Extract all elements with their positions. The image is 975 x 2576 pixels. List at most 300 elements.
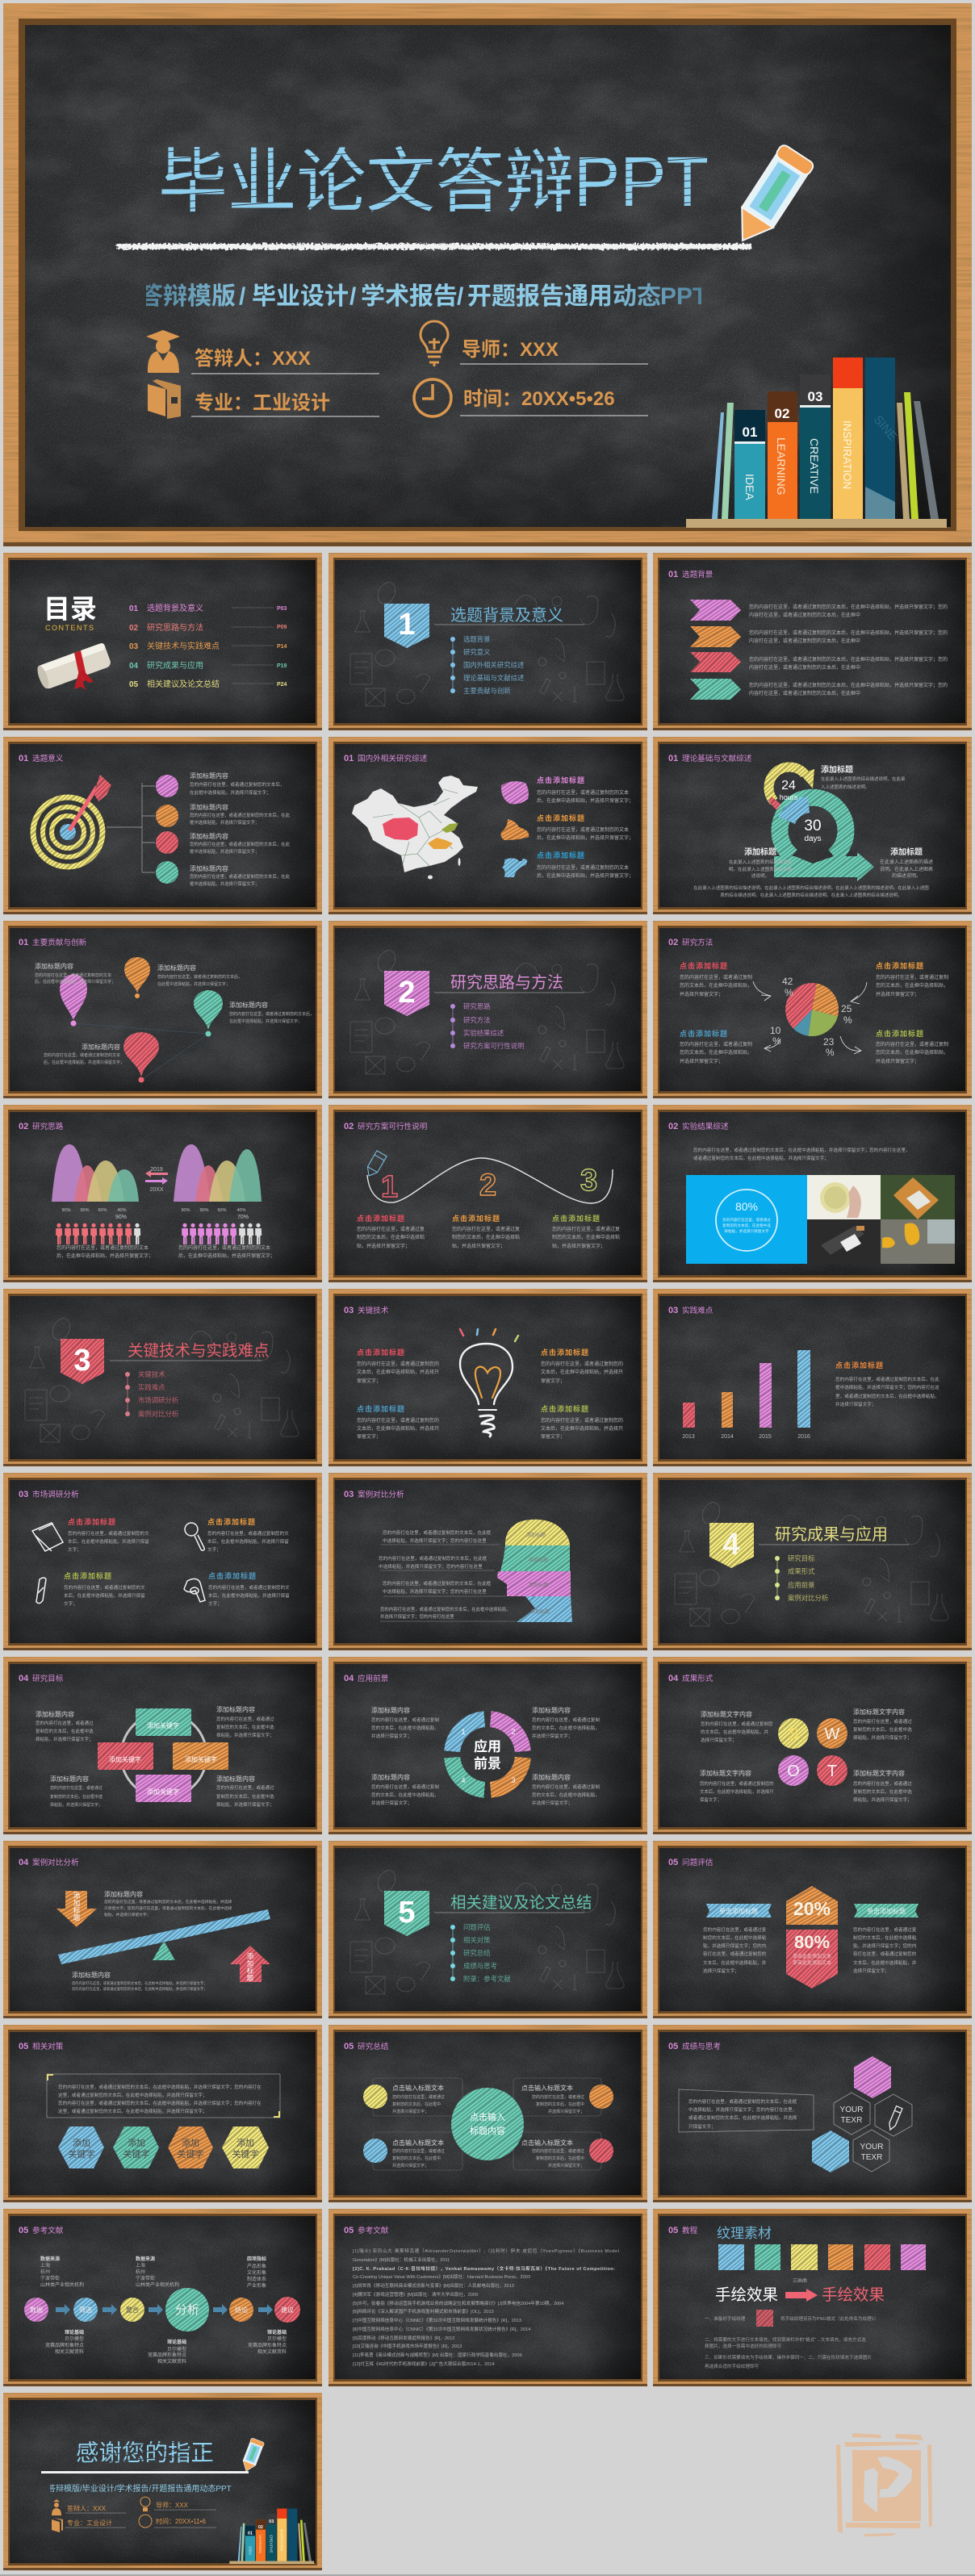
text blocks: 点击添加标题	[537, 851, 585, 859]
section bullets: 应用前景	[788, 1581, 815, 1589]
slide header: 研究总结	[358, 2042, 389, 2051]
text blocks: 您的内容打在这里，或者通过	[392, 2094, 445, 2100]
text blocks: 您的内容打在这里，或者通过	[36, 1720, 94, 1726]
intro text: 您的内容打在这里，或者通过复制您的文本后，在此框中选择粘贴，并选择只保留文字；您的内容打在这里，	[693, 1147, 910, 1153]
text blocks: 在此录入上述图表的综合描述说明，在此录	[821, 776, 906, 782]
text blocks: 您的内容打在这里，或者通过复	[552, 1226, 620, 1232]
slide header: 选题背景	[682, 570, 713, 579]
text blocks: 选择只保留文字；	[701, 1737, 737, 1743]
slide header: 市场调研分析	[32, 1490, 79, 1499]
percentage labels: 40%	[236, 1208, 246, 1213]
shield badge 1: 1	[398, 608, 416, 642]
text blocks: 择粘贴，并选择只保留文字；	[216, 1801, 274, 1808]
color swatches	[718, 2244, 926, 2270]
text blocks: 添加标题文字内容	[853, 1769, 905, 1777]
balance diagram: 题	[73, 1913, 81, 1922]
text blocks: 文字；	[64, 1600, 77, 1607]
pie chart	[753, 976, 867, 1058]
slide header: 研究思路	[32, 1122, 64, 1131]
bar chart: 2013	[682, 1434, 695, 1440]
slide header: 02	[344, 1122, 354, 1131]
text blocks: 点击添加标题	[68, 1517, 116, 1526]
SWOT circles: T	[827, 1763, 837, 1780]
text blocks: 您的文本后，在此框中选择粘贴，	[371, 1725, 439, 1731]
slide: topic significance	[3, 737, 322, 914]
photo: yellow chairs	[881, 1219, 955, 1264]
numbered outlines	[381, 1164, 597, 1204]
hero subtitle: 开题报告通用动态	[467, 283, 661, 310]
reference lines: [7]中国互联网络信息中心（CNNIC）《第32次中国互联网络发展统计报告》[R]，2013	[353, 2317, 521, 2323]
arrow list	[690, 600, 741, 700]
balance diagram	[56, 1891, 270, 1982]
top notes: 宁波带街	[40, 2275, 60, 2281]
text blocks: 您的内容打在这里，或者通过复制您的文本后，在此框中选择粘贴，并选择只保留文字；您的	[749, 604, 948, 610]
icon: bookshelf: CREATIVE	[808, 438, 821, 494]
text block: 您的内容打在这里，或者通过复制您的文本后，在此	[835, 1376, 939, 1382]
icon: bookshelf	[229, 2508, 314, 2564]
map pins	[60, 957, 223, 1083]
intro text	[693, 1147, 910, 1161]
slide header: 教程	[682, 2226, 698, 2235]
outlined frames	[373, 2078, 601, 2170]
slide: tutorial	[653, 2209, 972, 2386]
text blocks: 内容打在这里，或者通过复制您的文本后，在此框中	[749, 690, 860, 696]
slide header	[668, 2226, 698, 2235]
icon: bookshelf: LEARNING	[775, 437, 788, 496]
text blocks: 您的文本后，在此框中选择粘贴，	[876, 982, 948, 989]
hero subtitle	[146, 282, 701, 307]
top notes: 上海	[40, 2262, 50, 2269]
slanted text box: 或者通过复制您的文本后，在此框中选择粘贴，并选择	[688, 2114, 797, 2121]
section bullets: 实验结果综述	[463, 1029, 504, 1037]
text blocks: 您的内容打在这里，或者通过复制您的文本	[44, 1052, 120, 1058]
text blocks: 您的内容打在这里，或者通过	[532, 2148, 584, 2154]
icon: bookshelf: SINE	[871, 413, 899, 443]
text block: 里，或者通过复制您的文本后，在此框中选择粘贴，	[835, 1393, 939, 1399]
tutorial steps: 一、准备好手绘纹理	[705, 2315, 746, 2322]
process flow: 分析	[175, 2303, 199, 2317]
text blocks: 点击添加标题	[357, 1214, 405, 1223]
text blocks: 您的内容打在这里，或者通过复制您的文本后，在此框中选择粘贴，并选择	[104, 1899, 232, 1905]
area chart left	[52, 1144, 139, 1202]
text blocks: 您的内容打在这里，或者通过复制	[680, 974, 752, 981]
tutorial steps: 择图片，选择一张需中选好的纹理即可	[705, 2343, 782, 2349]
percent banners: 80%	[794, 1932, 830, 1952]
slide header	[19, 2226, 64, 2235]
slide header: 选题意义	[32, 754, 64, 763]
keyword hexagons: 添加	[236, 2137, 254, 2148]
icon: bulb	[421, 321, 448, 366]
ribbons: 单击添加标题	[867, 1907, 906, 1915]
text blocks: 并选择只保留文字；	[392, 2109, 429, 2114]
closing info	[52, 2497, 206, 2532]
pie chart: 10	[770, 1025, 781, 1036]
blue panel with 80%: 80%	[735, 1200, 758, 1213]
text blocks: 贴，并选择只保留文字；	[552, 1243, 605, 1249]
slide: section 1	[328, 553, 647, 730]
text blocks	[392, 2084, 584, 2168]
text blocks: 择粘贴，并选择只保留文字；	[36, 1736, 94, 1742]
text blocks: 点击输入标题文本	[521, 2139, 573, 2147]
reference lines	[353, 2248, 619, 2367]
keyword hexagons: 关键字	[178, 2148, 203, 2160]
percent banners: 单击此处添加文本	[793, 1959, 831, 1966]
section bullets: 选题背景	[463, 635, 491, 643]
icon: bookshelf: 01	[743, 424, 757, 440]
text blocks: 复制您的文本后，在此框中选	[36, 1728, 94, 1734]
slide header: 05	[668, 2042, 678, 2051]
pie chart: 25	[841, 1003, 852, 1014]
text blocks: 文本后，在此框中选择粘贴，并	[703, 1959, 767, 1966]
text blocks	[190, 772, 291, 887]
text blocks: 您的内容打在这里，或者通过复制您的文本后，在此框中选择粘贴，并选择只保留文字；您的	[749, 629, 948, 636]
contents list: P24	[277, 682, 287, 688]
text blocks: 点击添加标题	[680, 961, 728, 970]
balance diagram: 添	[73, 1892, 81, 1900]
hand-drawn effect demo: 三画曲	[793, 2277, 807, 2284]
cycle diagram: 24	[781, 779, 796, 792]
text blocks: 保留文字；	[357, 1378, 381, 1384]
slide header: 01	[19, 938, 28, 947]
central circle	[451, 2088, 524, 2160]
text blocks: 后，在此框中选择粘贴，并选择只保留文字；	[537, 797, 634, 804]
slide header: 关键技术	[358, 1306, 389, 1315]
slide header: 相关对策	[32, 2042, 64, 2051]
text blocks: 后，在此框中选择粘贴，并选择只保留文字；	[537, 872, 634, 879]
text blocks: 您的文本后，在此框中选择粘贴，	[532, 1725, 600, 1731]
bottom notes	[45, 2329, 287, 2365]
slide header: 成果形式	[682, 1674, 713, 1683]
icon: bookshelf: 03	[269, 2520, 274, 2524]
reference lines: [4]魏洪军《游戏运营管理》[M]出版社：清华大学出版社，2009	[353, 2291, 478, 2298]
bottom notes: 相关文献资料	[157, 2358, 186, 2365]
text blocks: 只保留文字。您的内容打在这里，或者通过复制您的文本后，在此框中选择	[104, 1905, 232, 1911]
text blocks: 在此录入上述图表的综合描述说明。在此录入上述图表的综合描述说明。在此录入上述图表的描述说明。在此录入上述图	[693, 884, 929, 891]
text blocks: 您的内容打在这里，或者通过复制您的文本	[56, 1244, 149, 1251]
text blocks: 文本后，在此框中选择粘贴，并选择只	[541, 1425, 623, 1432]
text blocks	[56, 1244, 275, 1259]
slide header	[19, 2042, 64, 2051]
top notes: 四项指标	[247, 2256, 266, 2262]
section bullets	[775, 1554, 828, 1602]
logo watermark stamp	[836, 2433, 932, 2536]
shield badge 5	[384, 1891, 429, 1936]
text blocks: 添加标题内容	[371, 1773, 410, 1781]
text blocks: 您的内容打在这里，或者通过复制	[371, 1717, 439, 1723]
text blocks: 您的文本后，在此框中选择粘贴，	[680, 982, 752, 989]
section bullets: 实践难点	[138, 1383, 165, 1391]
hexagon cluster: YOUR	[840, 2106, 863, 2114]
text blocks: 您的内容打在这里，或者通过复制您的文本	[537, 826, 629, 833]
slide: thank you	[3, 2393, 322, 2570]
slide header: 实验结果综述	[682, 1122, 729, 1131]
keyword hexagons	[58, 2126, 269, 2168]
text blocks: 您的内容打在这里，或者通过复制您的文本后，在此	[190, 873, 291, 880]
text blocks: 您的内容打在这里，或者通过复制您的文	[207, 1530, 289, 1537]
bottom notes: 贝尔模型	[267, 2336, 287, 2342]
slide: key technology bulb	[328, 1289, 647, 1466]
hero subtitle: /	[349, 283, 357, 310]
text blocks	[700, 1708, 912, 1803]
keyword hexagons: 添加	[182, 2137, 199, 2148]
text blocks: 点击添加标题	[207, 1517, 256, 1526]
text blocks: 添加标题内容	[36, 1710, 74, 1718]
text blocks: 框中选择粘贴，并选择只保留文字；	[190, 819, 259, 826]
slide header: 02	[668, 938, 678, 947]
text blocks: 您的内容打在这里，或者通过复制您的文本后，	[190, 781, 284, 788]
contents list: 研究思路与方法	[147, 622, 203, 633]
reference lines: [9]百度移动《移动互联网发展趋势报告》[R]，2012	[353, 2335, 455, 2341]
text blocks	[35, 962, 314, 1065]
numbered outlines: 3	[580, 1164, 597, 1198]
text blocks: 并选择只保留文字；	[371, 1733, 412, 1739]
hand-drawn effect demo: 手绘效果	[715, 2286, 778, 2304]
slide: contributions pins	[3, 921, 322, 1098]
text blocks: 文本后，在此框中选择粘贴，并选择只	[357, 1425, 439, 1432]
icon: bookshelf: INSPIRATION	[280, 2529, 284, 2551]
text blocks: 您的内容打在这里，或者通过复制您的文本后，	[229, 1011, 314, 1017]
process flow: 筛选	[79, 2306, 92, 2314]
pie chart: %	[785, 987, 793, 998]
section bullets: 成绩与思考	[463, 1962, 497, 1970]
text blocks: 您的内容打在这里，或者通过复	[452, 1226, 520, 1232]
process flow: 结论	[235, 2306, 248, 2314]
icon: chalk light bulb	[460, 1329, 518, 1436]
text rows: 中选择粘贴，并选择只保留文字；您的内容打在这里	[383, 1537, 487, 1544]
text blocks: 您的内容打在这里，或者通过复制您的文本	[178, 1244, 270, 1251]
bar chart: 2015	[759, 1434, 772, 1440]
people icons left	[56, 1223, 140, 1244]
shield badge 2	[384, 971, 429, 1016]
slide header: 05	[344, 2042, 354, 2051]
shield badge 3: 3	[73, 1344, 91, 1378]
icon: bookshelf: IDEA	[248, 2546, 252, 2556]
text blocks: 您的内容打在这里，或者通过复	[703, 1926, 767, 1933]
bottom notes: 贝尔模型	[167, 2346, 186, 2352]
contents list: 02	[129, 624, 139, 633]
section bullets	[450, 1002, 524, 1050]
section bullets: 研究思路	[463, 1002, 491, 1010]
slide header: 04	[344, 1674, 354, 1683]
top notes: 山林类产业相关机构	[40, 2281, 84, 2288]
section bullets: 研究目标	[788, 1554, 815, 1562]
text rows: 中选择粘贴，并选择只保留文字；您的内容打在这里	[383, 1588, 487, 1595]
section bullets	[125, 1370, 178, 1418]
text blocks: 您的内容打在这里，或者通过	[392, 2148, 445, 2154]
slide: theory cycle	[653, 737, 972, 914]
head diagram: 添加标题	[530, 1608, 550, 1615]
text rows: 您的内容打在这里，或者通过复制您的文本后，在此框	[379, 1555, 488, 1562]
hexagon cluster: TEXR	[861, 2153, 882, 2162]
icon: graduate	[146, 330, 180, 373]
text blocks: 您的内容打在这里，或者通过	[216, 1784, 274, 1791]
text blocks: 文字；	[207, 1546, 221, 1553]
text blocks: 您的内容打在这里，或者通过复制	[532, 1784, 600, 1790]
section bullets: 关键技术	[138, 1370, 165, 1378]
icon: clock	[414, 379, 451, 416]
text blocks: 后，在此框中选择粘贴，并选择只保留文字；	[537, 834, 634, 841]
slide: section 5	[328, 1841, 647, 2018]
text blocks: 保留文字；	[541, 1433, 565, 1440]
contents list: 04	[129, 662, 139, 671]
bottom notes: 竞赛品牌形象特点	[248, 2342, 287, 2348]
text blocks: 贴，并选择只保留文字；您的内	[703, 1942, 767, 1949]
process flow: 整合	[126, 2306, 139, 2314]
text blocks: 复制您的文本后，在此框中选	[216, 1724, 274, 1730]
text blocks: 您的内容打在这里，或者通过复制您的文本	[35, 972, 111, 978]
text block	[835, 1361, 939, 1407]
contents list: P09	[277, 625, 287, 630]
section bullets: 研究方法	[463, 1016, 491, 1024]
hero slide: title chalkboard	[3, 3, 972, 546]
slide header: 05	[19, 2226, 28, 2235]
balance diagram: 加	[247, 1959, 253, 1968]
closing labels: 答辩人：XXX	[67, 2504, 107, 2512]
section bullets: 主要贡献与创新	[463, 687, 511, 695]
text blocks: 您的内容打在这里，或者通过复制您的	[541, 1417, 623, 1424]
text blocks: 并选择只保留文字；	[876, 991, 919, 997]
text blocks: 在此框中选择粘贴，并选择只保留文字；	[157, 981, 230, 987]
text blocks: 点击输入标题文本	[392, 2084, 444, 2092]
text blocks: 内容打在这里，或者通过复制您的文本后，在此框中	[749, 638, 860, 644]
presenter info	[146, 321, 615, 419]
contents list: 01	[129, 604, 139, 613]
text blocks: 添加标题内容	[50, 1775, 89, 1783]
section bullets: 案例对比分析	[788, 1594, 828, 1602]
text blocks: 复制您的文本后，在此框中选	[853, 1788, 912, 1795]
text blocks: 复制您的文本后，在此框中	[536, 2101, 584, 2107]
percentage labels: 40%	[117, 1208, 127, 1213]
slide header: 03	[668, 1306, 678, 1315]
text blocks: 复制您的文本后，在此框中	[392, 2101, 441, 2107]
reference lines: [10]艾瑞咨询《中国手机游戏市场年度报告》[R]，2013	[353, 2343, 462, 2349]
section bullets: 附录：参考文献	[463, 1975, 511, 1983]
slide: research approach charts	[3, 1105, 322, 1282]
numbered outlines: 2	[479, 1169, 496, 1202]
segmented ring: 3	[511, 1776, 516, 1784]
percent banners	[786, 1886, 838, 1988]
balance diagram: 标	[247, 1967, 254, 1975]
text blocks	[703, 1926, 917, 1974]
reference lines: [6]网络评论《深入解读国产手机游戏盈利模式和市场前景》[OL]，2013	[353, 2308, 494, 2315]
contents list	[129, 603, 287, 689]
text blocks: 您的内容打在这里，或者通过复制您的文本后，在此框中选择粘贴，并选择只保留文字；	[72, 1986, 207, 1992]
section bullets: 研究方案可行性说明	[463, 1042, 524, 1050]
head diagram: 添加标题	[529, 1557, 548, 1563]
text blocks: 说明。在此录入上述图表	[880, 866, 933, 872]
SWOT circles: W	[825, 1725, 840, 1743]
slide header	[668, 2042, 721, 2051]
process flow: 建议	[281, 2306, 294, 2314]
bottom notes: 贝尔模型	[65, 2336, 84, 2342]
closing labels: 专业：工业设计	[67, 2519, 112, 2527]
text blocks: 点击添加标题	[541, 1404, 589, 1413]
percentage labels: 90%	[115, 1215, 127, 1220]
slide header: 成绩与思考	[682, 2042, 721, 2051]
slide: literature review map	[328, 737, 647, 914]
slide: market research	[3, 1473, 322, 1650]
icon: pencil	[726, 144, 815, 251]
contents list: 研究成果与应用	[147, 660, 203, 671]
SWOT circles: O	[787, 1763, 800, 1780]
text blocks: 添加标题内容	[35, 962, 73, 970]
section bullets: 案例对比分析	[138, 1410, 178, 1418]
slide header	[344, 2042, 389, 2051]
text blocks: 您的内容打在这里，或者通过复制您的文本后，在此框中选择粘贴，并选择只保留文字；	[72, 1980, 207, 1986]
contents list: 选题背景及意义	[147, 603, 203, 613]
text rows: 您的内容打在这里，或者通过复制您的文本后，在此框中选择粘贴，	[380, 1606, 511, 1612]
text blocks: 明。在此录入上述图表的综合描	[729, 866, 793, 872]
cycle of keyword cards: 添加关键字	[147, 1788, 179, 1796]
contents list: P03	[277, 606, 287, 612]
text blocks: 您的内容打在这里，或者通过复	[357, 1226, 425, 1232]
text blocks: 文本后，在此框中选择粘贴，并选择只	[541, 1369, 623, 1375]
slide: balance comparison	[3, 1841, 322, 2018]
slide header: 研究方法	[682, 938, 713, 947]
text blocks	[64, 1517, 290, 1607]
tutorial steps: 将手绘纹理另存为PNG格式（此处命名为纹理1）	[780, 2315, 879, 2322]
tutorial steps: 三、如果形状需要填充为手绘效果，操作步骤同一、二，只需在形状填充下选择图片	[705, 2354, 872, 2361]
text blocks: 选择只保留文字；	[853, 1968, 889, 1974]
slide: references list	[328, 2209, 647, 2386]
bottom notes: 理论基础	[65, 2329, 84, 2336]
text blocks: 添加标题文字内容	[701, 1710, 752, 1718]
shield badge 4	[709, 1523, 754, 1568]
bordered text box	[47, 2074, 280, 2118]
text blocks: 并选择只保留文字；	[392, 2163, 429, 2168]
text blocks: 文字；	[68, 1546, 82, 1553]
heading: texture material: 纹理素材	[717, 2226, 772, 2241]
numbered outlines: 1	[381, 1170, 398, 1204]
section bullets: 相关对策	[463, 1936, 491, 1944]
text blocks: 点击添加标题	[537, 776, 585, 784]
text blocks: 择粘贴，并选择只保留文字；	[50, 1802, 103, 1808]
icon: bookshelf: CREATIVE	[269, 2535, 273, 2553]
text blocks: 您的内容打在这里，或者通过	[532, 2094, 584, 2100]
slide header	[19, 754, 64, 763]
text blocks: 保留文字；	[357, 1433, 381, 1440]
text blocks	[680, 961, 948, 1064]
shield badge 2: 2	[398, 976, 416, 1010]
balance diagram: 题	[247, 1974, 254, 1982]
slide header: 05	[344, 2226, 354, 2235]
ribbons: 单击添加标题	[719, 1907, 758, 1915]
text blocks: 择粘贴，并选择只保留文字；	[853, 1734, 912, 1741]
hero subtitle: 毕业设计	[252, 283, 349, 310]
text blocks: 您的文本后，在此框中选择粘贴，	[680, 1049, 752, 1056]
keyword hexagons: 添加	[128, 2137, 145, 2148]
slanted text box: 只保留文字；	[688, 2123, 716, 2130]
slide: research summary	[328, 2025, 647, 2202]
icon circles	[156, 775, 178, 884]
text blocks: 添加标题内容	[72, 1971, 111, 1979]
text blocks: 添加标题内容	[532, 1773, 571, 1781]
hexagon cluster: TEXR	[841, 2116, 862, 2125]
top notes: 杭州	[40, 2269, 50, 2275]
text blocks: 您的内容打在这里，或者通过复	[853, 1926, 917, 1933]
cycle of keyword cards: 添加关键字	[147, 1721, 179, 1729]
text blocks	[357, 1214, 620, 1249]
percentage labels: 90%	[61, 1208, 71, 1213]
cycle diagram	[768, 767, 874, 881]
text blocks: 文字；	[208, 1600, 222, 1607]
balance diagram: 加	[73, 1899, 80, 1907]
text blocks: 您的内容打在这里，或者通过	[50, 1785, 103, 1791]
slide: references flow	[3, 2209, 322, 2386]
label: time: 时间：20XX•5•26	[463, 388, 615, 410]
percentage labels: 90%	[181, 1208, 190, 1213]
text blocks: 您的内容打在这里，或者通过复制您的文本	[537, 789, 629, 796]
